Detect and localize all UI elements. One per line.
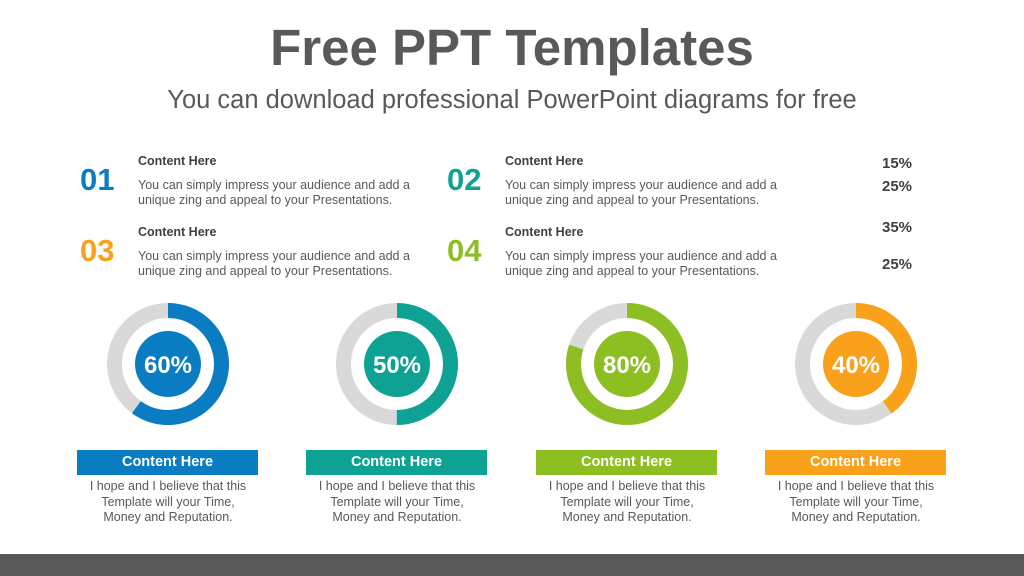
label 3: [536, 450, 717, 475]
footer bar: [0, 554, 1024, 576]
item 02: 02: [447, 162, 481, 197]
item 01: [80, 154, 410, 207]
item 03: Content Here: [138, 225, 216, 239]
item 04: [447, 225, 777, 278]
label 4: [765, 450, 946, 475]
label 1: Content Here: [122, 454, 213, 470]
item 01: You can simply impress your audience and add a unique zing and appeal to your Presentations.: [138, 178, 410, 207]
donut 80%: [574, 310, 680, 418]
percent list: 35%: [882, 219, 912, 236]
item 02: [447, 154, 777, 207]
donut 40%: 40%: [832, 352, 880, 379]
percent list: [882, 155, 912, 273]
item 01: 01: [80, 162, 114, 197]
item 04: You can simply impress your audience and add a unique zing and appeal to your Presentations.: [505, 249, 777, 278]
item 01: Content Here: [138, 154, 216, 168]
label 1: [77, 450, 258, 475]
donut 60%: 60%: [144, 352, 192, 379]
item 02: Content Here: [505, 154, 583, 168]
donut 50%: 50%: [373, 352, 421, 379]
item 04: 04: [447, 233, 481, 268]
donut 40%: [802, 310, 910, 418]
label 2: Content Here: [351, 454, 442, 470]
item 03: 03: [80, 233, 114, 268]
percent list: 15%: [882, 155, 912, 172]
item 04: Content Here: [505, 225, 583, 239]
donut 80%: 80%: [603, 352, 651, 379]
label 2: [306, 450, 487, 475]
item 03: [80, 225, 410, 278]
desc 3: I hope and I believe that this Template will your Time, Money and Reputation.: [549, 479, 705, 524]
subtitle: You can download professional PowerPoint diagrams for free: [167, 86, 857, 114]
label 4: Content Here: [810, 454, 901, 470]
label 3: Content Here: [581, 454, 672, 470]
desc 4: I hope and I believe that this Template will your Time, Money and Reputation.: [778, 479, 934, 524]
donut 60%: [114, 310, 222, 418]
percent list: 25%: [882, 256, 912, 273]
item 03: You can simply impress your audience and add a unique zing and appeal to your Presentations.: [138, 249, 410, 278]
title: Free PPT Templates: [270, 19, 754, 76]
desc 1: I hope and I believe that this Template will your Time, Money and Reputation.: [90, 479, 246, 524]
desc 2: I hope and I believe that this Template will your Time, Money and Reputation.: [319, 479, 475, 524]
percent list: 25%: [882, 178, 912, 195]
donut 50%: [344, 310, 450, 418]
item 02: You can simply impress your audience and add a unique zing and appeal to your Presentations.: [505, 178, 777, 207]
